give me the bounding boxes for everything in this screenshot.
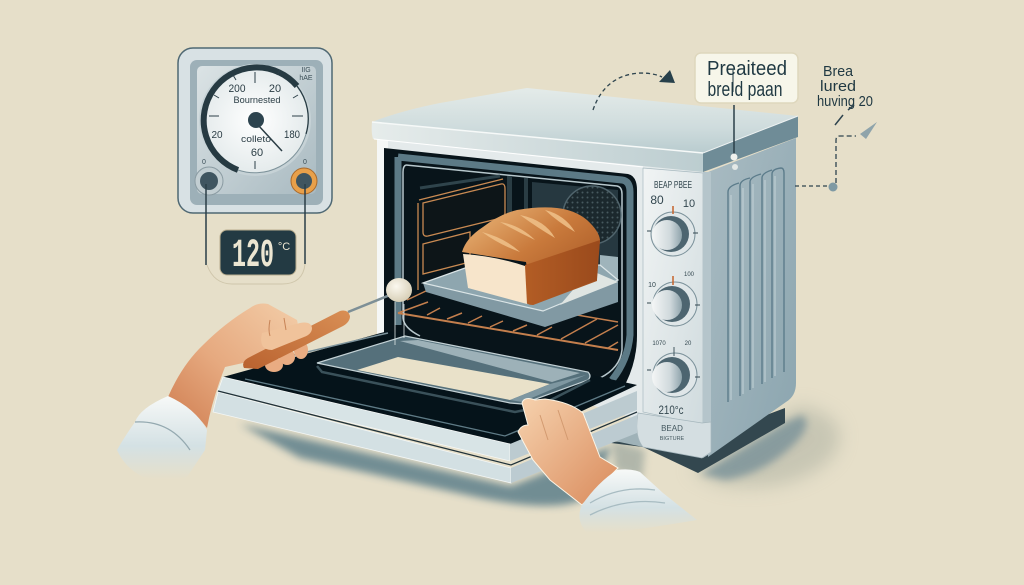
dough in tray xyxy=(357,357,550,400)
door inner xyxy=(223,331,637,445)
wires xyxy=(205,184,207,265)
digital display: °C xyxy=(278,241,290,253)
dial: hAE xyxy=(299,75,313,82)
control panel: 80 xyxy=(650,193,664,207)
oven base xyxy=(603,408,785,473)
dial: 20 xyxy=(211,130,223,141)
bread loaf xyxy=(462,207,600,305)
callout: preheated bread pan: Preaiteed xyxy=(707,58,787,80)
dashed leader with arrow xyxy=(795,105,877,192)
knob 2: 10 xyxy=(648,282,656,289)
gauge casing xyxy=(178,48,332,213)
left sleeve xyxy=(117,396,207,480)
knob 3: 1070 xyxy=(652,341,666,347)
knob 3: 20 xyxy=(685,341,692,347)
dial: 180 xyxy=(284,129,300,141)
door frame xyxy=(384,148,637,390)
side label text xyxy=(817,63,873,110)
control panel: BIGTURE xyxy=(660,436,685,442)
control panel: BEAP PBEE xyxy=(654,180,692,191)
callout: preheated bread pan xyxy=(695,53,798,103)
dial: 0 xyxy=(303,159,307,166)
needle xyxy=(258,125,282,151)
fan xyxy=(563,186,621,244)
knob 1 xyxy=(647,206,698,256)
palm and arm xyxy=(168,304,298,428)
score marks xyxy=(482,210,575,252)
floor shadows xyxy=(240,405,840,506)
callout: preheated bread pan: breId paan xyxy=(708,79,782,101)
thumb xyxy=(261,323,312,350)
top front lip xyxy=(372,122,703,172)
floor wedge under control panel xyxy=(610,415,643,447)
rack xyxy=(398,290,618,350)
dashed curved arrow xyxy=(593,70,675,110)
heating element xyxy=(418,179,505,290)
open door xyxy=(213,331,637,483)
dial: 60 xyxy=(251,147,263,159)
left hand xyxy=(117,304,350,480)
right hand xyxy=(518,399,697,533)
spoon handle xyxy=(243,311,350,369)
control panel: 210°c xyxy=(658,403,684,417)
gauge knobs xyxy=(195,167,317,195)
control panel xyxy=(637,168,711,458)
control panel: BEAD xyxy=(661,424,683,433)
knob 2: 100 xyxy=(684,272,695,278)
back wall xyxy=(507,176,528,260)
spoon with dough ball xyxy=(348,278,412,345)
side label text: huving 20 xyxy=(817,93,873,110)
digital display: 120 xyxy=(232,234,274,279)
left front trim xyxy=(377,137,388,335)
upper baking tray xyxy=(423,255,618,327)
side label text: Brea xyxy=(823,63,854,80)
dial: 20 xyxy=(269,83,281,95)
side label text: lured xyxy=(820,78,856,95)
callout leader line xyxy=(730,105,738,170)
front face xyxy=(377,137,703,425)
knob 2 xyxy=(647,272,700,326)
dial: 0 xyxy=(202,159,206,166)
lower baking tray xyxy=(317,336,590,412)
oven opening xyxy=(384,148,637,390)
crumb xyxy=(463,254,527,304)
fingers xyxy=(265,341,308,372)
top surface xyxy=(372,88,798,153)
dial xyxy=(199,64,313,176)
oven xyxy=(117,88,798,533)
dial: Bournested xyxy=(234,95,280,106)
top side lip xyxy=(703,116,798,172)
dial: colleto xyxy=(241,134,271,145)
knob 3 xyxy=(647,341,700,397)
door lower strip xyxy=(213,392,511,483)
door upper strip xyxy=(218,377,510,461)
control panel: 10 xyxy=(683,198,695,210)
dial: 200 xyxy=(228,83,246,95)
side panel with vents xyxy=(708,138,796,457)
panel base xyxy=(637,413,711,458)
crust xyxy=(462,207,600,305)
loaf side xyxy=(525,240,600,305)
right sleeve xyxy=(579,469,697,533)
temperature gauge xyxy=(178,48,332,284)
dial: IIG xyxy=(301,67,311,74)
